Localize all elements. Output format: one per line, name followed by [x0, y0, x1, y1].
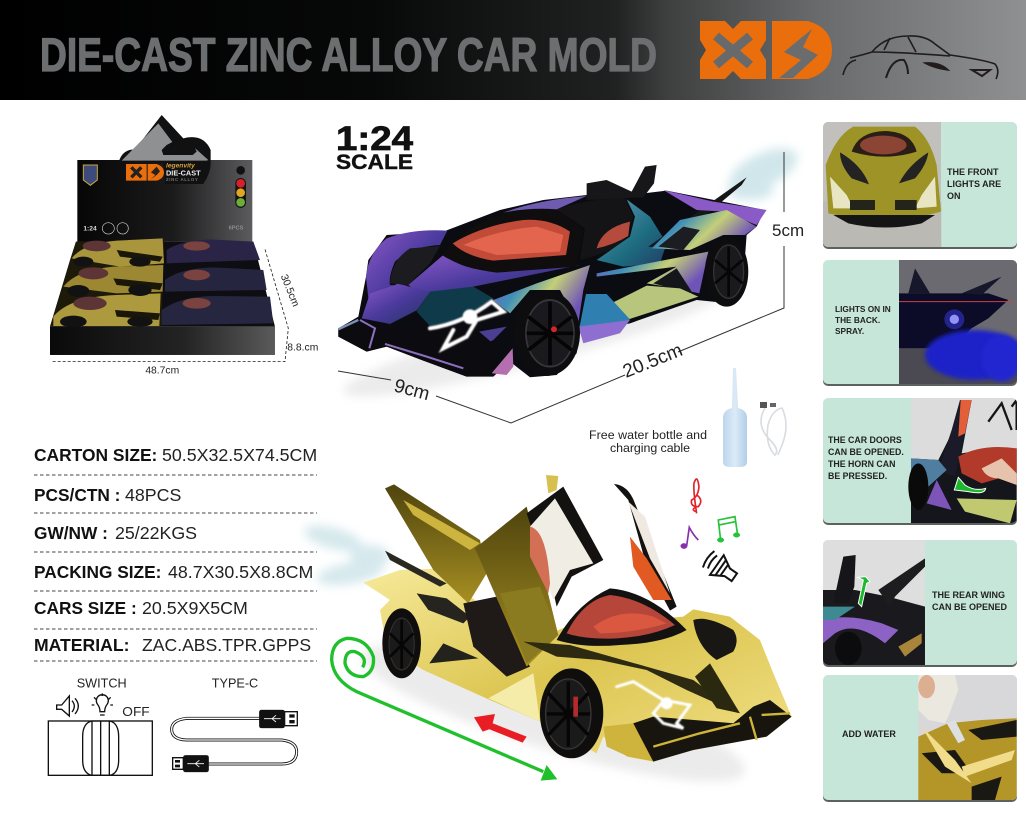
icon: car silhouette — [843, 36, 998, 79]
front bumper — [338, 320, 497, 377]
rear fender rainbow — [597, 252, 708, 293]
box logo — [126, 162, 201, 182]
purple car photo — [337, 139, 804, 414]
car doors caption: THE HORN CAN — [828, 459, 895, 469]
fender and sill — [488, 673, 540, 722]
scale label: SCALE — [336, 151, 413, 174]
windshield — [442, 209, 583, 273]
front lights caption: THE FRONT — [947, 167, 999, 177]
icon: red treble clef — [691, 479, 701, 513]
gold car spray — [302, 520, 390, 590]
hood intake — [693, 619, 737, 660]
box scale text: 1:24 — [83, 226, 97, 233]
speaker icon — [57, 696, 78, 716]
switch diagram: OFF — [122, 704, 150, 719]
rear wheel — [382, 608, 421, 678]
height label: 5cm — [772, 221, 804, 240]
scale label — [336, 120, 413, 174]
material row: ZAC.ABS.TPR.GPPS — [142, 635, 311, 655]
roof and side glass — [557, 198, 633, 260]
front fender — [493, 265, 590, 323]
water bottle accessory — [589, 368, 786, 467]
headlight — [617, 682, 690, 728]
back lights caption: THE BACK. — [835, 315, 880, 325]
weight row: 25/22KGS — [115, 523, 197, 543]
car body — [338, 191, 765, 377]
rear fin — [587, 165, 657, 200]
panel: rear wing — [823, 540, 1017, 667]
box logo: DIE-CAST — [166, 169, 201, 178]
headlight — [352, 287, 503, 348]
charging cable — [760, 402, 786, 455]
back lights photo — [899, 268, 1025, 385]
tray front — [50, 327, 275, 355]
red direction arrow — [474, 714, 527, 743]
rear wing photo — [823, 555, 925, 665]
teal hood flash — [417, 287, 493, 326]
far door — [614, 484, 677, 611]
hood shade — [523, 642, 738, 713]
type-c cable diagram: TYPE-C — [212, 676, 258, 690]
packing size row: PACKING SIZE: — [34, 562, 161, 582]
rear wheel — [705, 237, 748, 307]
door teal — [597, 199, 667, 267]
panel: add water — [823, 675, 1017, 802]
car body — [363, 568, 792, 762]
box scale text — [83, 223, 244, 234]
box dimensions: 48.7cm — [145, 365, 179, 376]
rear wing caption: CAN BE OPENED — [932, 602, 1008, 612]
scale label: 1:24 — [336, 120, 413, 158]
depth label: 9cm — [392, 376, 432, 405]
carton size row: CARTON SIZE: — [34, 445, 157, 465]
icon: purple note — [681, 527, 698, 549]
cars size row: 20.5X9X5CM — [142, 598, 248, 618]
pcs row: 48PCS — [125, 485, 181, 505]
car doors caption: THE CAR DOORS — [828, 435, 902, 445]
icon: XD logo — [700, 21, 832, 79]
box logo: ZINC ALLOY — [166, 177, 198, 182]
side intake — [429, 643, 478, 663]
tray with cars — [50, 238, 275, 328]
panel: car doors — [823, 398, 1017, 525]
icon: speaker muted — [700, 548, 741, 587]
door window frame — [527, 487, 603, 607]
front lights photo — [823, 127, 941, 248]
roof top colour — [503, 196, 587, 213]
front wheel — [513, 291, 580, 376]
rear wing caption: THE REAR WING — [932, 590, 1005, 600]
pcs row: PCS/CTN : — [34, 485, 120, 505]
box dimensions: 30.5cm — [278, 273, 301, 309]
header banner — [0, 0, 1026, 100]
bulb icon — [92, 693, 113, 715]
switch diagram — [48, 676, 152, 775]
back lights caption: LIGHTS ON IN — [835, 304, 891, 314]
packing size row: 48.7X30.5X8.8CM — [168, 562, 313, 582]
width label: 20.5cm — [620, 340, 686, 383]
nose panel — [362, 284, 430, 324]
door open — [475, 507, 558, 667]
door interior dark — [463, 597, 530, 677]
box dimensions — [53, 249, 318, 376]
spray mist — [723, 139, 804, 201]
add water photo — [918, 675, 1017, 800]
badge shield — [83, 165, 97, 185]
wing open — [385, 484, 487, 603]
cars size row: CARS SIZE : — [34, 598, 137, 618]
specification list — [34, 445, 317, 655]
traffic light — [235, 166, 246, 208]
side panels — [610, 286, 698, 320]
cable loop — [172, 718, 297, 764]
hood — [408, 255, 580, 297]
accessory caption: charging cable — [610, 441, 690, 455]
panel: front lights — [823, 122, 1017, 249]
type-c cable diagram — [172, 676, 297, 772]
plug bottom — [173, 755, 209, 772]
gold car photo — [332, 475, 792, 807]
front wheel — [540, 668, 603, 758]
dimension lines — [338, 152, 804, 423]
left hood bulge — [366, 230, 447, 313]
switch diagram: SWITCH — [77, 676, 127, 690]
carton size row: 50.5X32.5X74.5CM — [162, 445, 317, 465]
weight row: GW/NW : — [34, 523, 108, 543]
car doors caption: BE PRESSED. — [828, 471, 887, 481]
product box illustration — [50, 115, 318, 376]
car doors caption: CAN BE OPENED. — [828, 447, 904, 457]
air intake — [390, 246, 440, 285]
box dimensions: 8.8.cm — [287, 342, 318, 353]
icon: green notes — [717, 517, 740, 542]
box logo: legenvity — [166, 162, 195, 169]
material row: MATERIAL: — [34, 635, 129, 655]
box lid panel — [77, 160, 252, 242]
title: DIE-CAST ZINC ALLOY CAR MOLD — [40, 28, 657, 81]
rear wing — [663, 190, 767, 225]
plug top — [259, 710, 297, 728]
raised wing — [648, 177, 747, 248]
doors photo — [908, 400, 1017, 523]
accessory caption: Free water bottle and — [589, 428, 707, 442]
front lights caption: LIGHTS ARE — [947, 179, 1001, 189]
panel: back lights — [823, 260, 1025, 386]
windshield — [557, 588, 687, 646]
slider — [48, 721, 152, 775]
back lights caption: SPRAY. — [835, 326, 864, 336]
box scale text: 6PCS — [229, 225, 244, 231]
front bumper — [633, 700, 792, 762]
add water caption: ADD WATER — [842, 729, 896, 739]
mountain badge — [119, 115, 211, 184]
front lights caption: ON — [947, 191, 960, 201]
green pull-back arrow — [332, 638, 557, 781]
